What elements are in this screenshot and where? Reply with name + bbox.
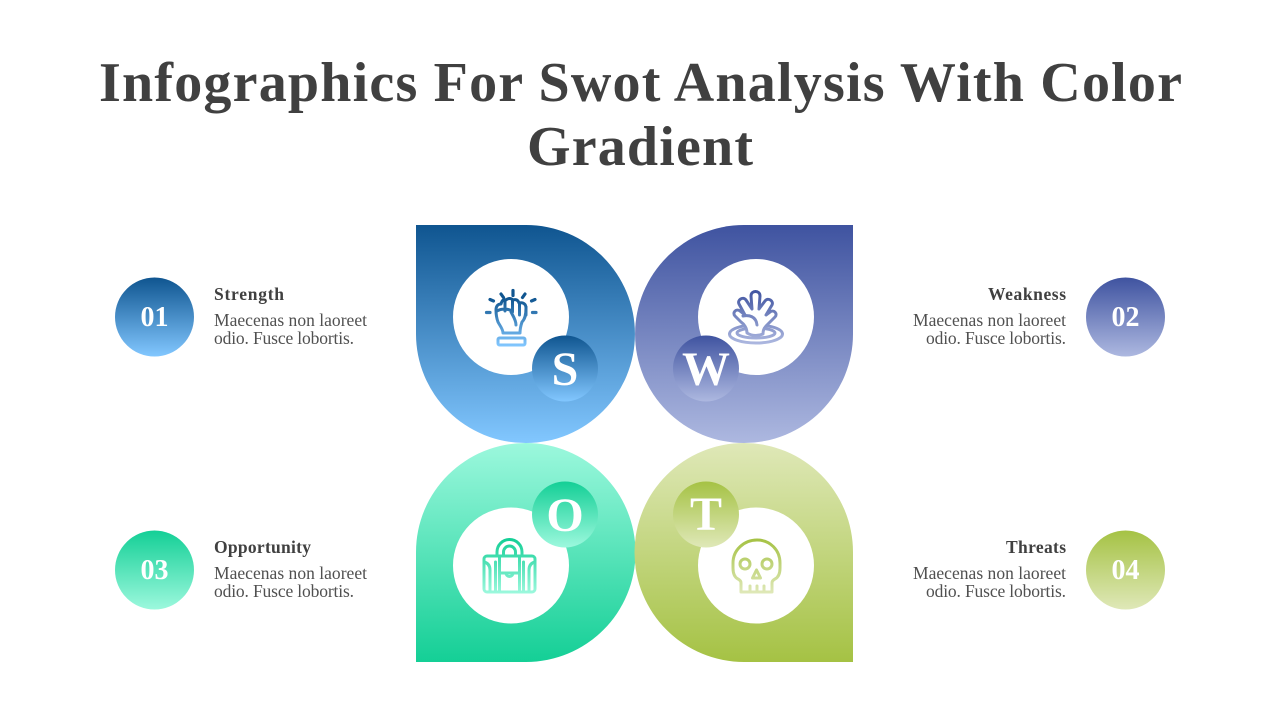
text block: Strength: Strength: [214, 284, 284, 304]
text block: Weakness: Maecenas non laoreet: [913, 310, 1066, 330]
badge: S: S: [552, 343, 578, 396]
title: [99, 52, 1182, 178]
badge: T: T: [690, 488, 722, 541]
panel: threats petal: [634, 443, 853, 662]
text block: Weakness: Weakness: [988, 284, 1066, 304]
number badge 04: 04: [1112, 555, 1140, 586]
text block: Opportunity: Opportunity: [214, 537, 311, 557]
text block: Strength: Maecenas non laoreet: [214, 310, 367, 330]
text block: Threats: Maecenas non laoreet: [913, 563, 1066, 583]
text block: Strength: odio. Fusce lobortis.: [214, 328, 354, 348]
number badge 01: [115, 278, 194, 356]
text block: Opportunity: odio. Fusce lobortis.: [214, 581, 354, 601]
badge: W: W: [682, 343, 730, 396]
title: Infographics For Swot Analysis With Color: [99, 52, 1182, 114]
text block: Strength: [214, 284, 367, 348]
text block: Opportunity: [214, 537, 367, 601]
text block: Weakness: odio. Fusce lobortis.: [926, 328, 1066, 348]
panel: weakness petal: [635, 225, 853, 443]
panel: opportunity petal: [416, 443, 636, 662]
text block: Threats: odio. Fusce lobortis.: [926, 581, 1066, 601]
text block: Weakness: [913, 284, 1066, 348]
badge: S: [532, 336, 598, 402]
number badge 03: [115, 530, 194, 610]
icon: briefcase: [484, 540, 535, 592]
icon: skull: [733, 540, 780, 592]
number badge 02: [1086, 278, 1165, 356]
icon: hand emerging from ripple: [730, 292, 782, 343]
text block: Threats: [913, 537, 1066, 601]
icon: raised fist: [486, 290, 536, 345]
number badge 04: [1086, 530, 1165, 610]
badge: T: [673, 482, 739, 548]
title: Gradient: [527, 116, 753, 178]
text block: Opportunity: Maecenas non laoreet: [214, 563, 367, 583]
text block: Threats: Threats: [1006, 537, 1066, 557]
number badge 03: 03: [140, 555, 168, 586]
panel: strength petal: [416, 225, 635, 443]
badge: O: [532, 482, 598, 548]
badge: W: [673, 336, 739, 402]
badge: O: O: [546, 489, 584, 542]
number badge 01: 01: [140, 302, 168, 333]
number badge 02: 02: [1112, 302, 1140, 333]
